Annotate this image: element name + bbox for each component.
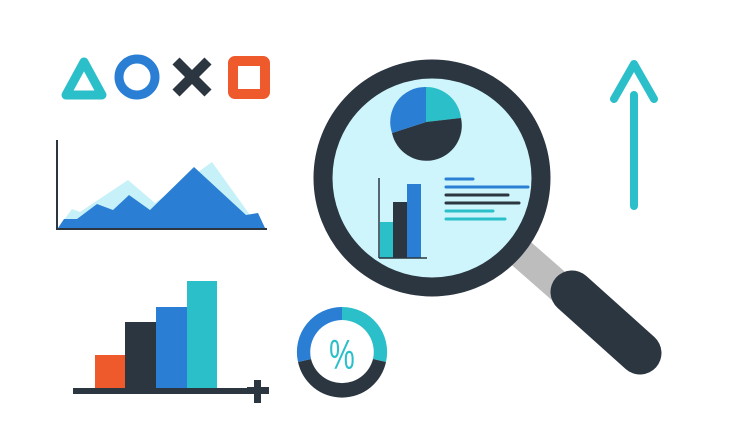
bar chart bbox=[73, 281, 269, 403]
donut: percent bbox=[297, 307, 387, 398]
icon: circle bbox=[119, 59, 155, 95]
arrow up bbox=[614, 64, 654, 206]
text lines bbox=[446, 179, 528, 219]
area chart bbox=[56, 140, 267, 229]
lens bar chart bbox=[379, 178, 427, 258]
pie chart bbox=[390, 87, 462, 161]
magnifier bbox=[323, 69, 640, 353]
icon: cross bbox=[176, 61, 208, 93]
icon: triangle bbox=[66, 62, 102, 95]
donut: percent: % bbox=[329, 332, 355, 378]
icon: square bbox=[233, 61, 265, 94]
